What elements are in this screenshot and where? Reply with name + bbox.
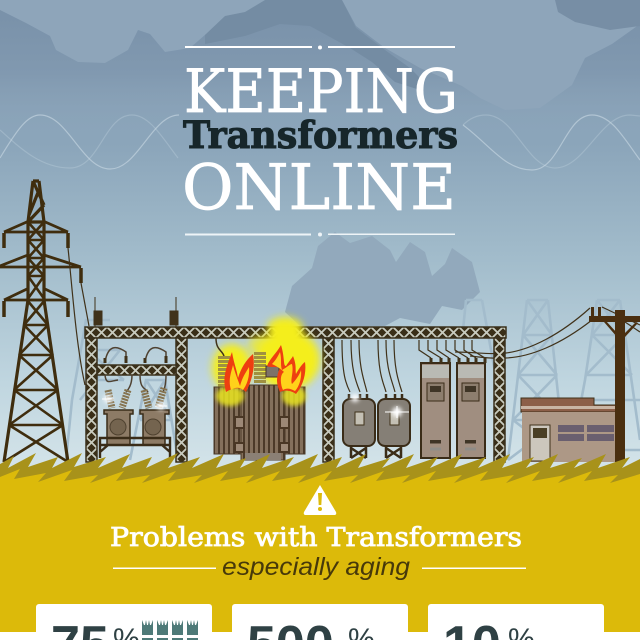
control building (521, 398, 619, 462)
stat card: 10% (428, 604, 604, 640)
wires (342, 340, 402, 392)
lower glow spots (216, 386, 306, 406)
section heading: Problems with Transformers (110, 522, 522, 553)
bushings (224, 352, 260, 388)
background pylons (66, 300, 640, 460)
arcing sparks (102, 394, 409, 418)
main pylon (0, 181, 81, 462)
smoke plume (285, 232, 480, 326)
tank 2 (378, 394, 410, 458)
stat card: 75% (36, 604, 212, 640)
top beam (85, 327, 506, 338)
top rule (185, 46, 455, 50)
walls (522, 412, 617, 462)
insulators (4, 233, 81, 317)
transmission wires (68, 248, 640, 385)
stat card: 500% (232, 604, 408, 640)
roof (521, 398, 619, 412)
tank 1 (343, 394, 375, 458)
left flames (224, 352, 254, 392)
terminal box (266, 366, 279, 377)
grass olive layer (0, 453, 640, 500)
sine waves right (463, 115, 640, 170)
sine waves left (0, 115, 179, 169)
pillar 1 (86, 338, 97, 462)
yellow section background (0, 483, 640, 632)
bushings (108, 388, 164, 408)
wire to bushing (216, 338, 224, 356)
lightning rods (94, 297, 178, 327)
utility pole (589, 307, 640, 462)
fire glow (212, 317, 320, 392)
title (182, 46, 458, 236)
cabinet wires (419, 340, 485, 358)
door (530, 425, 550, 461)
flames (224, 345, 305, 394)
breaker tanks (104, 410, 169, 445)
pillar 2 (176, 338, 187, 462)
storm clouds (0, 0, 640, 135)
cabinet 1 (421, 363, 450, 458)
tank centre (241, 385, 285, 460)
sky background (0, 0, 640, 480)
potential transformers (342, 340, 410, 458)
cabinet 2 (457, 363, 485, 458)
title line: ONLINE: ONLINE (182, 151, 456, 224)
white band (0, 632, 640, 640)
gantry steel frame (85, 297, 506, 462)
cross beam (97, 365, 176, 375)
subheading: especially aging (222, 553, 410, 581)
control cabinets (419, 340, 485, 458)
breaker stand (100, 438, 170, 458)
pylon arms (0, 221, 81, 300)
windows (558, 425, 614, 441)
pillar 4 (494, 338, 505, 462)
title line: Transformers: Transformers (183, 113, 458, 157)
cooling fins (214, 387, 305, 454)
bottom rule (185, 232, 455, 236)
brackets (235, 417, 289, 452)
icon: warning triangle (304, 485, 336, 515)
overhead switches (105, 348, 166, 392)
pylon body (4, 181, 68, 462)
circuit breakers (100, 348, 170, 458)
right flames (267, 345, 305, 394)
title line: KEEPING: KEEPING (184, 57, 458, 127)
grass yellow layer (0, 469, 640, 500)
icon: transformer row (142, 620, 198, 640)
burning transformer (214, 338, 305, 460)
pillar 3 (323, 338, 334, 462)
